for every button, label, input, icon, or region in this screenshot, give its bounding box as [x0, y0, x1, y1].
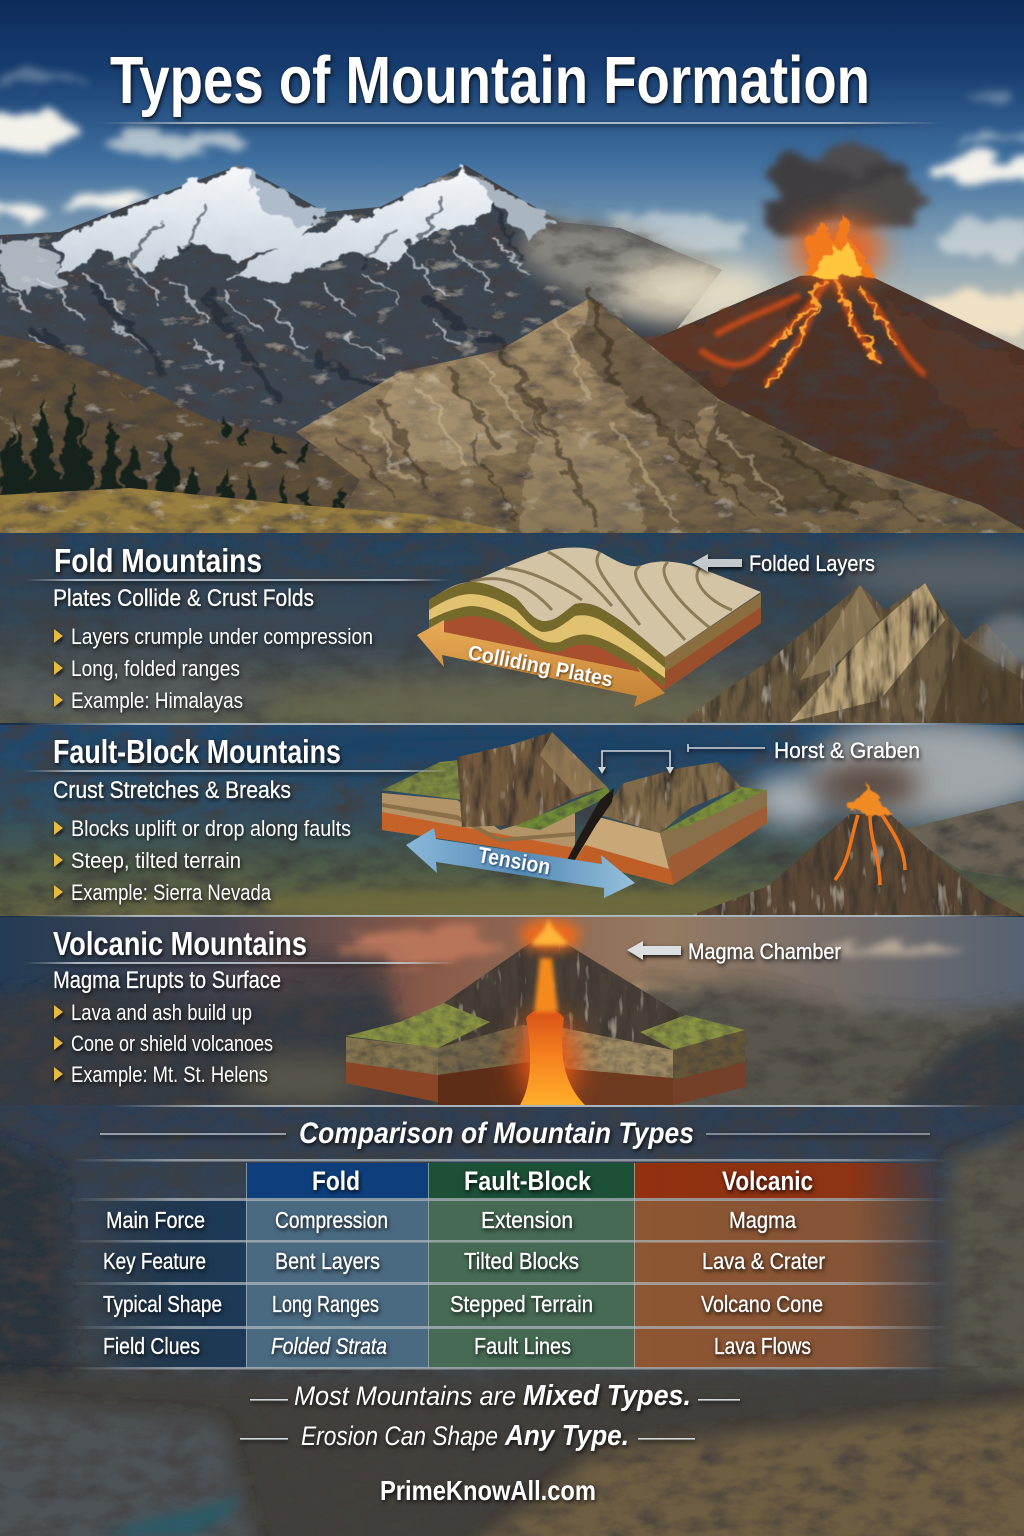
callout: horst and graben: Horst & Graben [774, 738, 920, 763]
snow streaks [0, 240, 530, 370]
smoke plume [764, 145, 930, 232]
closing note: erosion [240, 1420, 695, 1452]
table header row [312, 1166, 813, 1196]
volcanic bullets: Cone or shield volcanoes [71, 1031, 273, 1056]
callout: magma chamber: Magma Chamber [688, 939, 841, 964]
arrow: tension: Tension [476, 842, 552, 880]
fold block diagram [429, 548, 761, 690]
right side of block [665, 593, 761, 690]
fault panel volcano [690, 761, 1024, 916]
fault text block [25, 733, 450, 905]
arrow: colliding plates [417, 620, 665, 707]
heading: volcanic mountains: Volcanic Mountains [53, 925, 307, 962]
fault panel background [0, 720, 1024, 923]
snowfields [0, 168, 555, 295]
volcanic bullets: Lava and ash build up [71, 1000, 252, 1025]
arrow: colliding plates: Colliding Plates [466, 641, 615, 692]
lava conduit [518, 1016, 578, 1104]
row: key feature: Tilted Blocks [464, 1248, 579, 1274]
left rocky horst [457, 732, 607, 827]
table header row: Fault-Block [464, 1166, 592, 1196]
fold text block [25, 542, 450, 713]
left block front wall [382, 793, 575, 863]
fault block diagram [382, 732, 767, 885]
grass plateaus [346, 1003, 490, 1048]
closing note: erosion: Erosion Can Shape [301, 1421, 498, 1451]
section divider [20, 723, 1020, 725]
panel: volcanic mountains [0, 917, 1024, 1130]
row: field clues [103, 1333, 811, 1359]
table grid [70, 1159, 950, 1370]
block faces [346, 1037, 438, 1102]
row: main force: Magma [729, 1207, 796, 1233]
fold panel background [0, 533, 1024, 731]
volcano cross-section diagram [346, 943, 745, 1105]
heading: fault-block mountains: Fault-Block Mountains [53, 733, 341, 770]
row: field clues: Folded Strata [271, 1333, 387, 1359]
graben grass [515, 787, 612, 830]
clouds [0, 75, 1024, 334]
row: main force [106, 1207, 796, 1233]
eruption crater fire [520, 918, 580, 951]
row: key feature: Key Feature [103, 1248, 206, 1274]
snow-capped range [0, 164, 784, 446]
comparison table [70, 1159, 952, 1370]
volcanic text block [25, 925, 455, 1087]
row: main force: Compression [275, 1207, 388, 1233]
callout: magma chamber [627, 939, 841, 964]
central rocky mountain [296, 298, 1024, 533]
closing note: mixed types: Mixed Types. [523, 1380, 691, 1412]
row: typical shape: Volcano Cone [701, 1291, 823, 1317]
volcano [641, 274, 1024, 530]
table fills [80, 1163, 952, 1368]
sky [0, 0, 1024, 350]
fold background peaks [680, 583, 1024, 723]
table column lines [246, 1163, 635, 1368]
closing note: mixed types [250, 1380, 740, 1412]
panel: fault-block mountains [0, 720, 1024, 923]
fold bullets: Long, folded ranges [71, 656, 240, 681]
website credit: PrimeKnowAll.com [380, 1475, 596, 1506]
subheading: volcanic: Magma Erupts to Surface [53, 967, 281, 994]
cone [438, 943, 686, 1050]
table header row: Volcanic [722, 1166, 813, 1196]
fold bullets: Layers crumple under compression [71, 624, 373, 649]
dark rock ridges [35, 200, 520, 395]
right block walls [575, 817, 673, 885]
subheading: fold: Plates Collide & Crust Folds [53, 585, 314, 612]
arrow: tension [406, 828, 635, 898]
callout: folded layers [692, 551, 875, 576]
callout: folded layers: Folded Layers [749, 551, 875, 576]
fault bullets [54, 816, 351, 905]
volcanic bullets: Example: Mt. St. Helens [71, 1062, 268, 1087]
closing note: erosion: Any Type. [504, 1420, 629, 1452]
volcanic bullets [54, 1000, 273, 1087]
row: field clues: Fault Lines [474, 1333, 571, 1359]
closing note: mixed types: Most Mountains are [294, 1381, 516, 1411]
fault crack [566, 788, 614, 862]
row: field clues: Lava Flows [714, 1333, 811, 1359]
left forest slope [0, 335, 360, 508]
heading: fold mountains: Fold Mountains [54, 542, 262, 579]
eruption fire [792, 212, 884, 280]
fault bullets: Steep, tilted terrain [71, 848, 241, 873]
volcanic panel background [0, 917, 1024, 1130]
callout: horst and graben [598, 738, 920, 774]
foreground grass [0, 488, 520, 533]
row: main force: Main Force [106, 1207, 205, 1233]
row: typical shape: Long Ranges [272, 1291, 379, 1317]
folded top surface [429, 548, 761, 657]
row: field clues: Field Clues [103, 1333, 200, 1359]
section divider [20, 915, 1020, 917]
fold bullets: Example: Himalayas [71, 688, 243, 713]
comparison heading: Comparison of Mountain Types [299, 1117, 694, 1150]
comparison section background [0, 1105, 1024, 1536]
row: key feature: Lava & Crater [702, 1248, 825, 1274]
right rocky horst [600, 762, 741, 833]
title: Types of Mountain Formation [110, 43, 870, 118]
distant grey ridge [520, 215, 722, 320]
table header row: Fold [312, 1166, 360, 1196]
fold bullets [54, 624, 373, 713]
row: typical shape: Stepped Terrain [450, 1291, 593, 1317]
fault bullets: Example: Sierra Nevada [71, 880, 272, 905]
panel: fold mountains [0, 533, 1024, 731]
hero mountain landscape [0, 0, 1024, 535]
subheading: fault: Crust Stretches & Breaks [53, 777, 291, 804]
row: key feature [103, 1248, 825, 1274]
row: key feature: Bent Layers [275, 1248, 380, 1274]
row: typical shape: Typical Shape [103, 1291, 222, 1317]
front cross-section [429, 582, 665, 690]
row: main force: Extension [481, 1207, 573, 1233]
row: typical shape [103, 1291, 823, 1317]
left plateau grass [382, 760, 462, 800]
horizon haze [615, 262, 775, 318]
fault bullets: Blocks uplift or drop along faults [71, 816, 351, 841]
